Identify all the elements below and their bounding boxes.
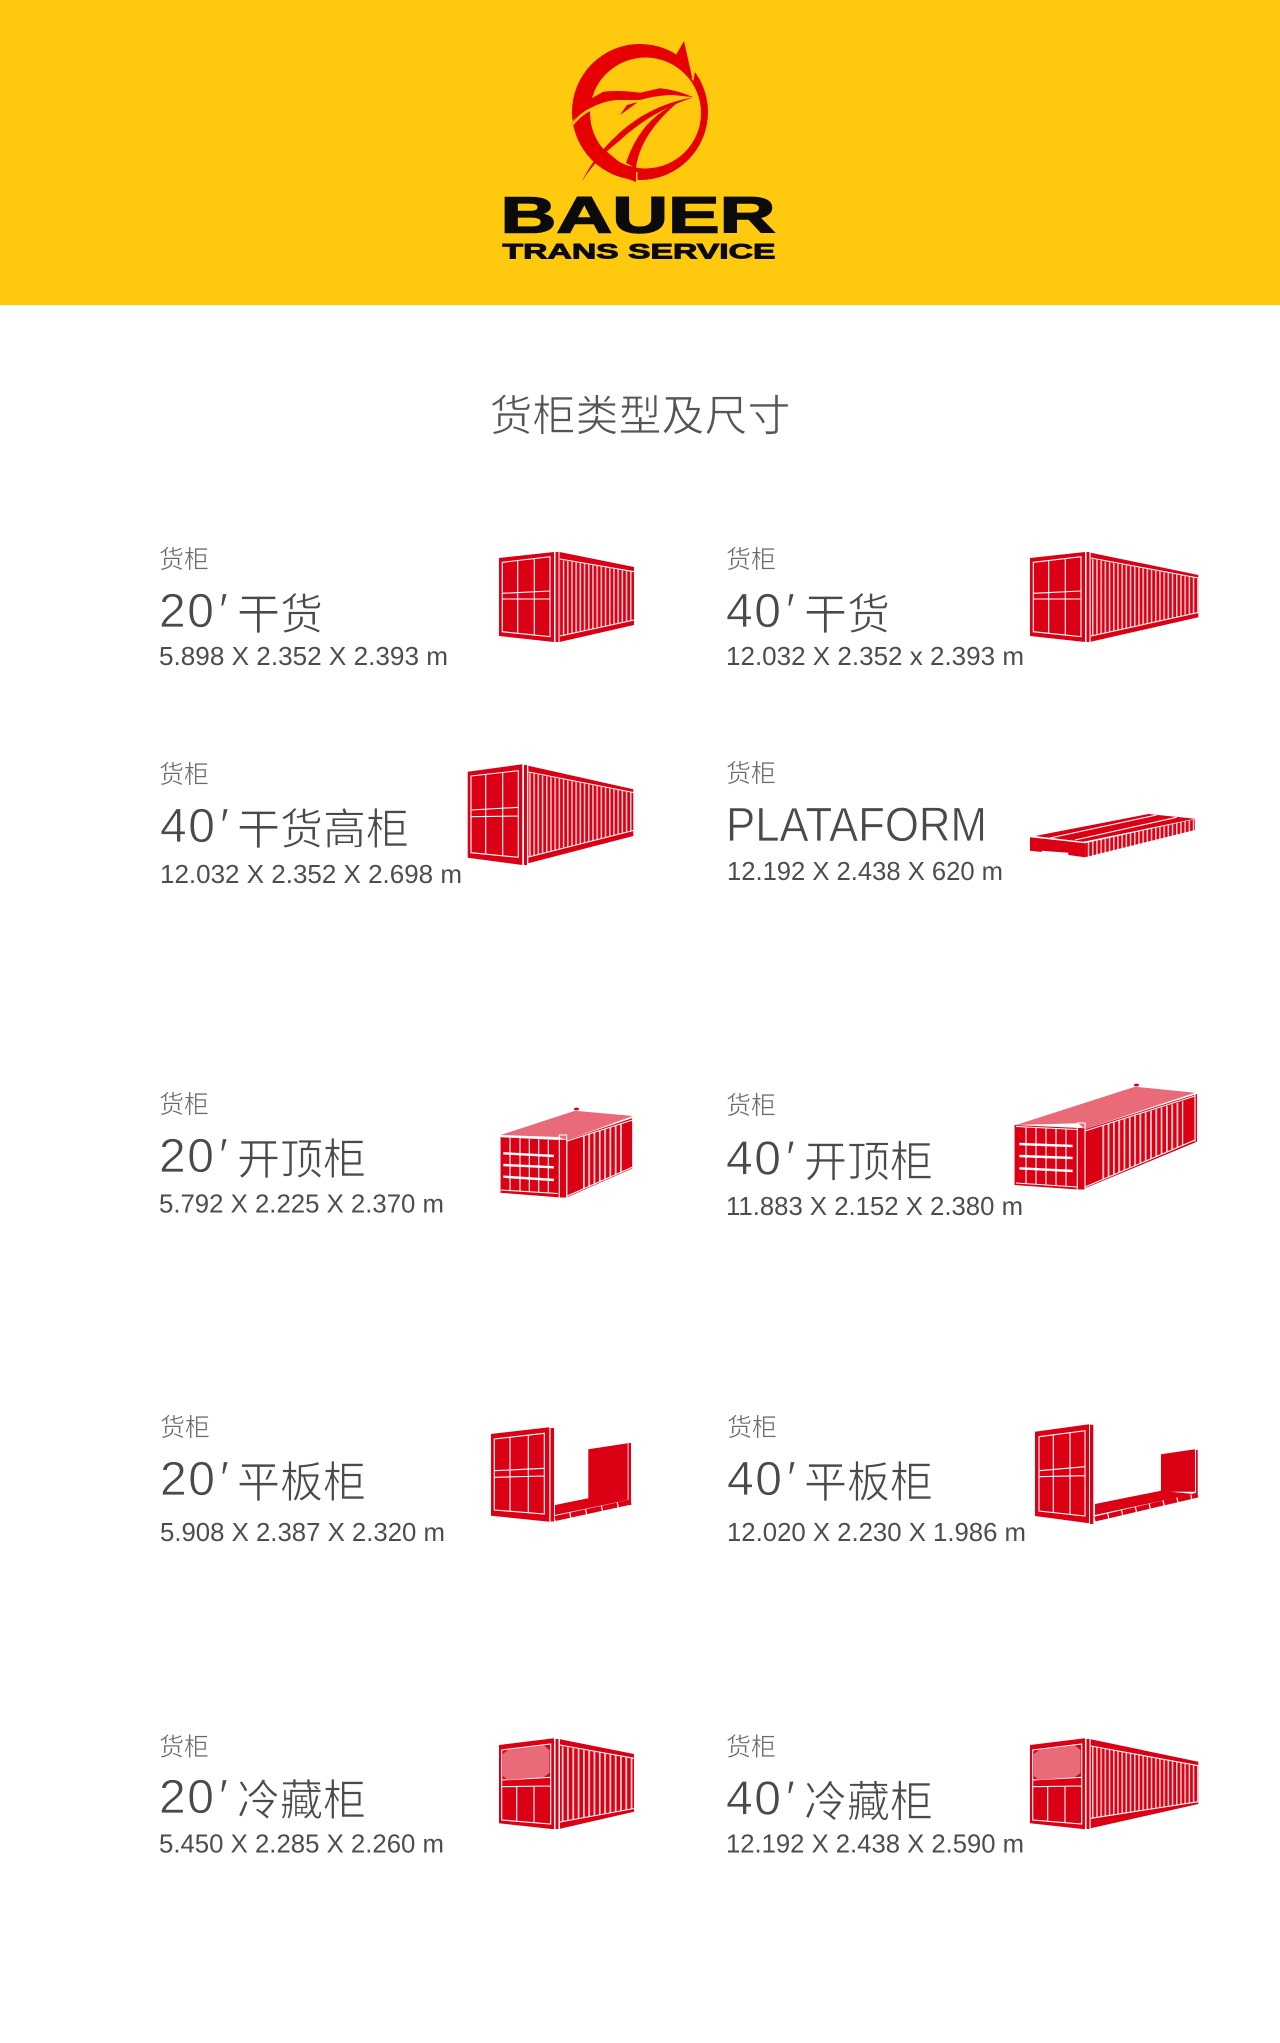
text: 40' reefer — [726, 1734, 1024, 1858]
text: 40' reefer: 货柜 — [726, 1734, 776, 1762]
panel: 40' reefer — [726, 1734, 1198, 1858]
logo wordmark: TRANS SERVICE: TRANS SERVICE — [502, 240, 776, 264]
text: 40' open top: 货柜 — [726, 1092, 776, 1120]
text: 40' high cube: ′ — [220, 800, 230, 853]
text: 20' open top: 开顶柜 — [237, 1136, 366, 1184]
text: 40' open top: 40 — [726, 1132, 782, 1186]
text: 40' open top: 11.883 X 2.152 X 2.380 m — [726, 1191, 1023, 1221]
text: 40' reefer: 40 — [726, 1772, 782, 1826]
text: 40' reefer: 12.192 X 2.438 X 2.590 m — [726, 1828, 1024, 1858]
panel: 40' flat rack — [727, 1414, 1198, 1547]
text: 20' dry — [159, 546, 448, 671]
icon: 20' flat rack container — [491, 1427, 631, 1522]
text: 20' reefer: 20 — [159, 1771, 215, 1824]
text: 40' high cube: 40 — [160, 800, 216, 853]
text: 40' high cube: 12.032 X 2.352 X 2.698 m — [160, 859, 462, 889]
logo: Bauer Trans Service — [500, 41, 776, 264]
text: 20' open top: 5.792 X 2.225 X 2.370 m — [159, 1188, 444, 1218]
header band — [0, 0, 1280, 305]
text: 20' open top: ′ — [219, 1130, 230, 1183]
panel: 40' open top — [726, 1084, 1197, 1221]
text: 40' high cube: 货柜 — [159, 761, 209, 789]
text: 20' dry: 干货 — [237, 592, 323, 640]
text: 40' dry: 货柜 — [726, 546, 776, 574]
icon: 20' reefer container — [499, 1738, 634, 1829]
text: 40' dry: 40 — [726, 585, 782, 638]
panel: 20' reefer — [159, 1734, 634, 1858]
text: 20' reefer — [159, 1734, 444, 1858]
text: 40' flat rack — [727, 1414, 1026, 1547]
logo emblem — [567, 41, 708, 184]
text: 20' open top: 20 — [159, 1130, 215, 1183]
text: 40' open top: ′ — [786, 1132, 796, 1186]
text: 40' open top: 开顶柜 — [804, 1139, 933, 1187]
panel: 20' flat rack — [160, 1414, 631, 1547]
text: 20' open top — [159, 1091, 444, 1218]
text: platform: PLATAFORM — [726, 799, 987, 852]
icon: platform container — [1030, 814, 1195, 858]
text: 20' dry: 20 — [159, 585, 215, 638]
panel: 20' open top — [159, 1091, 633, 1218]
text: platform: 12.192 X 2.438 X 620 m — [727, 856, 1003, 886]
text: 20' flat rack — [160, 1414, 445, 1547]
text: 40' flat rack: ′ — [787, 1453, 798, 1506]
text: 40' reefer: ′ — [786, 1772, 796, 1826]
panel: 40' dry high cube — [159, 761, 633, 889]
text: 20' dry: 5.898 X 2.352 X 2.393 m — [159, 641, 448, 671]
text: 40' dry: 12.032 X 2.352 x 2.393 m — [726, 641, 1024, 671]
text: 20' flat rack: 5.908 X 2.387 X 2.320 m — [160, 1517, 445, 1547]
text: 40' high cube — [159, 761, 462, 889]
text: 40' flat rack: 40 — [727, 1453, 783, 1506]
text: platform: 货柜 — [726, 760, 776, 788]
panel: 20' dry — [159, 546, 634, 671]
text: 20' reefer: 货柜 — [159, 1734, 209, 1762]
text: 40' dry: ′ — [786, 585, 796, 638]
text: 40' dry — [726, 546, 1024, 671]
panel: 40' dry — [726, 546, 1198, 671]
panel: platform — [726, 760, 1195, 886]
text: 20' reefer: 5.450 X 2.285 X 2.260 m — [159, 1828, 444, 1858]
text: 40' dry: 干货 — [804, 592, 890, 640]
text: 40' high cube: 干货高柜 — [237, 806, 409, 854]
icon: 40' open top container — [1014, 1084, 1197, 1190]
text: 40' flat rack: 12.020 X 2.230 X 1.986 m — [727, 1517, 1026, 1547]
text: 20' flat rack: 货柜 — [160, 1414, 210, 1442]
title: 货柜类型及尺寸 — [490, 393, 790, 441]
icon: 40' dry container — [1030, 552, 1198, 642]
icon: 40' high cube container — [468, 764, 633, 865]
text: 40' open top — [726, 1092, 1023, 1221]
icon: 20' dry container — [499, 552, 634, 642]
text: 20' reefer: ′ — [219, 1771, 230, 1824]
icon: 40' reefer container — [1030, 1738, 1198, 1829]
text: 20' open top: 货柜 — [159, 1091, 209, 1119]
text: 40' flat rack: 平板柜 — [804, 1460, 933, 1508]
text: 20' dry: 货柜 — [159, 546, 209, 574]
text: platform — [726, 760, 1003, 886]
text: 40' flat rack: 货柜 — [727, 1414, 777, 1442]
text: 20' flat rack: ′ — [220, 1453, 230, 1506]
text: 20' flat rack: 20 — [160, 1453, 216, 1506]
text: 20' dry: ′ — [219, 585, 230, 638]
icon: 40' flat rack container — [1035, 1424, 1198, 1524]
logo wordmark: BAUER: BAUER — [500, 186, 776, 244]
text: 20' reefer: 冷藏柜 — [237, 1778, 366, 1826]
icon: 20' open top container — [500, 1108, 633, 1198]
text: 40' reefer: 冷藏柜 — [804, 1779, 933, 1827]
text: 20' flat rack: 平板柜 — [237, 1460, 366, 1508]
